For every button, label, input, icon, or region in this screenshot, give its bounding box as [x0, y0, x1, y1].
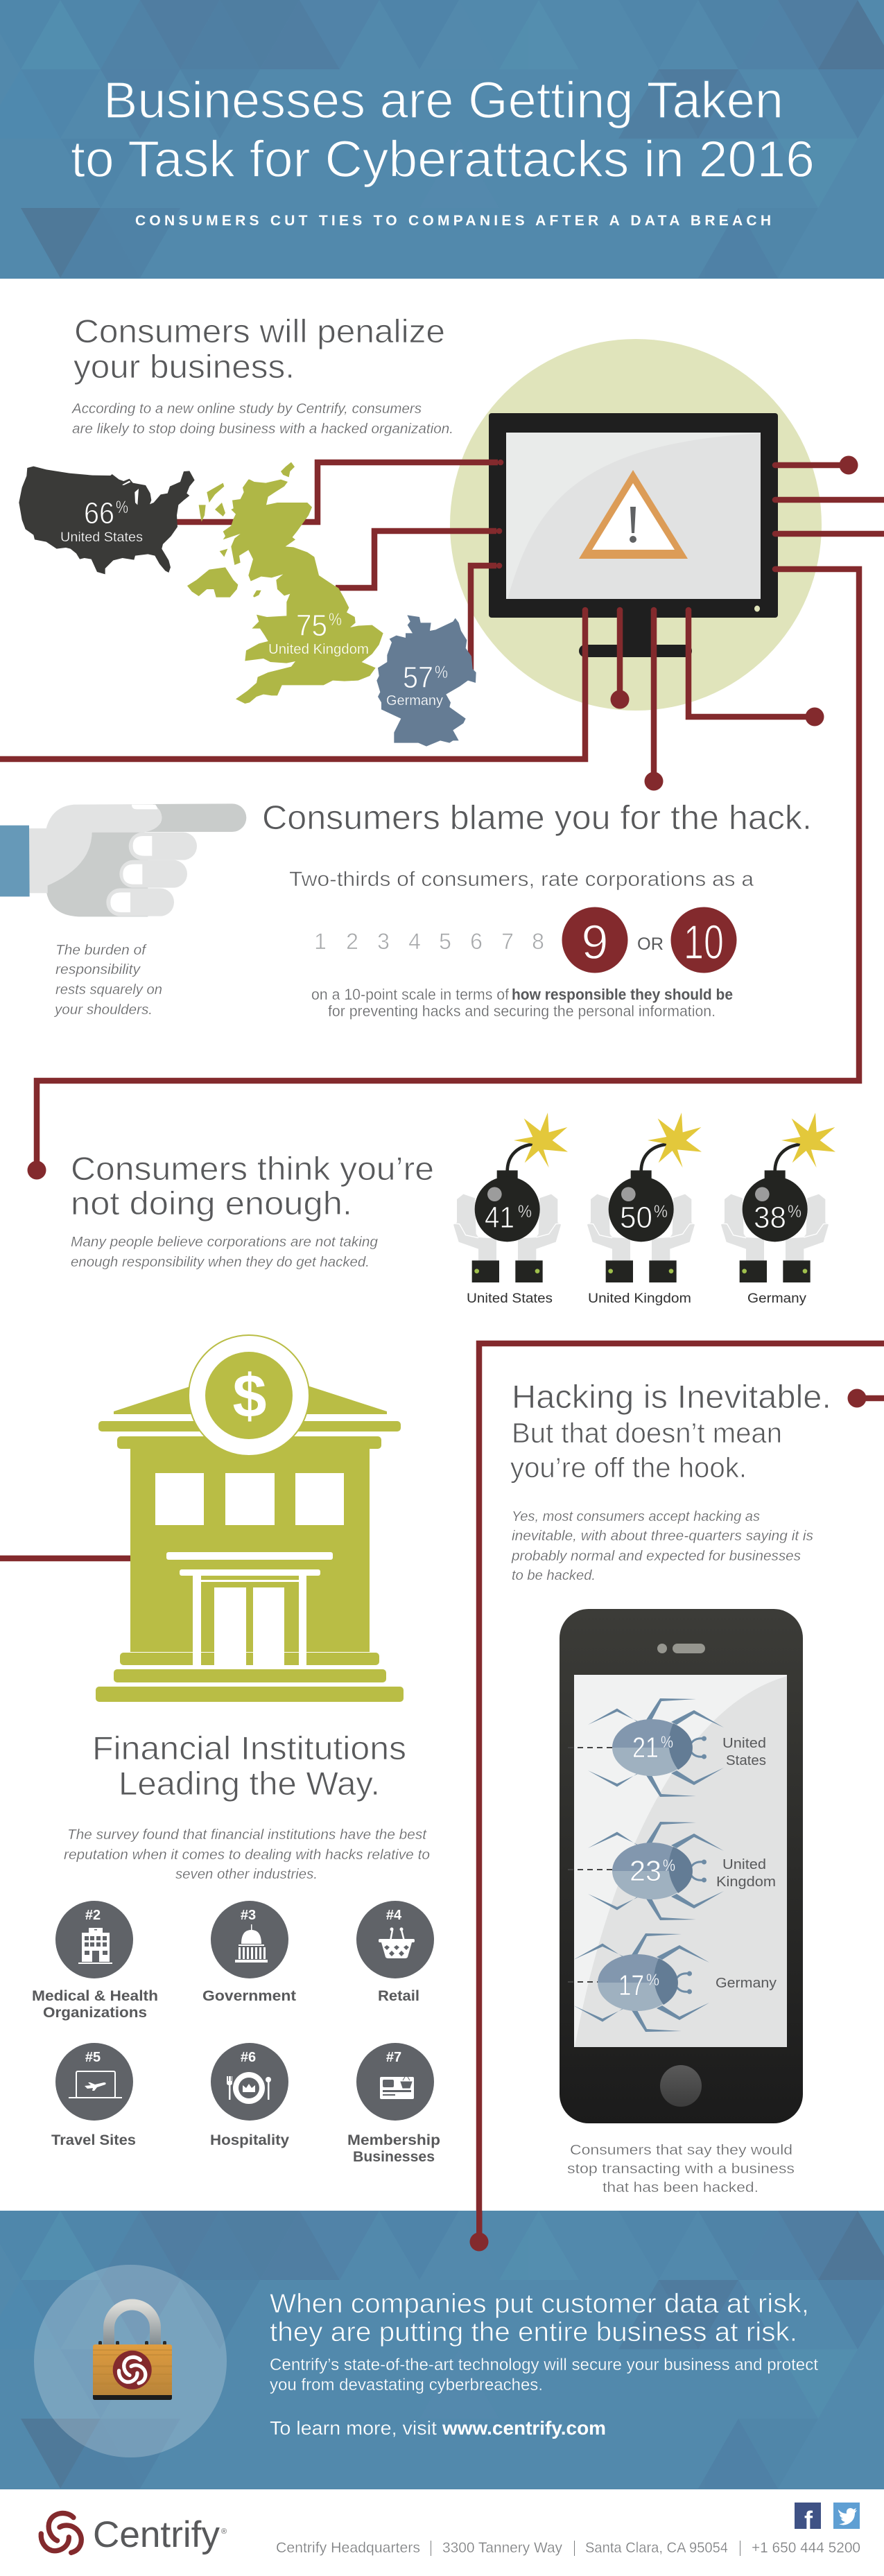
address line — [276, 2540, 860, 2556]
burden caption: rests squarely on — [55, 982, 162, 998]
bug: united states: United — [722, 1736, 766, 1751]
monitor screen — [506, 433, 761, 599]
icon: hospital — [78, 1928, 112, 1964]
coin: $ — [233, 1361, 266, 1430]
call to action: www.centrify.com — [442, 2417, 606, 2439]
bug: germany — [568, 1933, 777, 2032]
bomb: united kingdom: % — [654, 1202, 668, 1221]
bug: united states: % — [661, 1733, 673, 1752]
address line: Centrify Headquarters — [276, 2540, 420, 2556]
map: germany — [376, 615, 476, 747]
map: united kingdom: % — [329, 610, 342, 629]
not doing enough paragraph: enough responsibility when they do get hacked. — [71, 1255, 370, 1270]
map: united states — [19, 467, 195, 574]
map: united kingdom — [187, 462, 383, 704]
icon: plate and cutlery — [227, 2072, 271, 2104]
hacking paragraph: inevitable, with about three-quarters saying it is — [512, 1529, 813, 1544]
burden caption: The burden of — [55, 943, 148, 958]
address line: 3300 Tannery Way — [442, 2540, 562, 2556]
rating scale — [314, 907, 736, 973]
heading: financial institutions: Financial Institutions — [92, 1730, 406, 1766]
financial paragraph: reputation when it comes to dealing with hacks relative to — [64, 1847, 430, 1863]
map: united states: % — [116, 498, 128, 517]
icon: pointing hand — [0, 803, 246, 916]
map: germany: % — [435, 663, 448, 682]
rating scale: 10 — [684, 915, 724, 969]
phone caption — [567, 2143, 795, 2195]
icon: twitter — [833, 2503, 860, 2529]
title — [71, 71, 815, 188]
call to action — [270, 2417, 606, 2439]
bomb: united kingdom: United Kingdom — [588, 1291, 691, 1306]
connector end — [470, 2211, 488, 2252]
bomb: germany — [721, 1113, 835, 1306]
address line: +1 650 444 5200 — [752, 2540, 860, 2556]
heading: hacking is inevitable: Hacking is Inevitable. — [512, 1378, 831, 1415]
monitor illustration — [450, 339, 822, 711]
bug: united kingdom: Kingdom — [716, 1874, 776, 1890]
call to action: To learn more, visit — [270, 2417, 437, 2439]
rating scale: OR — [637, 934, 664, 954]
industry: membership businesses — [347, 2043, 440, 2165]
icon: facebook — [795, 2503, 821, 2534]
intro paragraph: are likely to stop doing business with a hacked organization. — [72, 421, 453, 437]
home button — [660, 2065, 702, 2107]
icon: laptop with plane — [69, 2071, 122, 2098]
rating scale: 1 — [314, 929, 327, 954]
connector traces — [0, 456, 884, 2252]
heading: financial institutions: Leading the Way. — [119, 1765, 380, 1802]
heading: consumers will penalize — [73, 313, 445, 385]
industry: hospitality: Hospitality — [210, 2132, 289, 2148]
bug: united states — [568, 1698, 766, 1797]
centrify logo — [41, 2513, 227, 2555]
industry: retail: Retail — [378, 1988, 419, 2004]
responsibility paragraph — [311, 986, 733, 1020]
industry: medical and health — [32, 1901, 158, 2021]
bug: united kingdom: 23 — [630, 1854, 661, 1887]
not doing enough paragraph: Many people believe corporations are not taking — [71, 1235, 378, 1250]
heading: consumers will penalize: Consumers will penalize — [74, 313, 445, 349]
hacking paragraph — [511, 1509, 813, 1583]
industry: medical and health: #2 — [85, 1908, 101, 1923]
industry: medical and health: Organizations — [43, 2005, 147, 2021]
bomb: united kingdom — [587, 1113, 702, 1306]
industry: membership businesses: #7 — [386, 2050, 401, 2065]
icon: basket — [379, 1927, 415, 1958]
background circle — [450, 339, 822, 711]
phone caption: Consumers that say they would — [570, 2143, 792, 2158]
bomb: germany: 38 — [754, 1201, 786, 1235]
icon: capitol — [235, 1924, 268, 1963]
intro paragraph — [71, 401, 453, 437]
map: united states: 66 — [84, 496, 114, 530]
centrify logo: ® — [221, 2527, 227, 2536]
bomb: united states — [453, 1113, 568, 1306]
industry: retail — [356, 1901, 434, 2004]
coin — [189, 1335, 309, 1456]
map: germany: Germany — [386, 693, 443, 708]
industry: travel sites — [51, 2043, 136, 2148]
bomb: united states: United States — [467, 1291, 553, 1306]
title: Businesses are Getting Taken — [103, 71, 783, 129]
bug: united states: 21 — [632, 1731, 659, 1764]
rating scale: 3 — [377, 929, 390, 954]
phone screen — [574, 1675, 787, 2047]
title: to Task for Cyberattacks in 2016 — [71, 130, 815, 188]
bug: germany: Germany — [716, 1976, 777, 1991]
burden caption — [53, 943, 162, 1018]
closing headline: When companies put customer data at risk, — [270, 2289, 809, 2319]
bomb: united states: % — [518, 1202, 532, 1221]
responsibility paragraph: for preventing hacks and securing the personal information. — [328, 1002, 716, 1020]
phone body — [560, 1609, 803, 2123]
monitor stand — [579, 618, 692, 657]
rating scale: 4 — [408, 929, 421, 954]
closing headline — [270, 2289, 809, 2347]
closing paragraph: Centrify’s state-of-the-art technology will secure your business and protect — [270, 2356, 818, 2374]
heading: not doing enough: not doing enough. — [71, 1185, 352, 1221]
heading: financial institutions — [92, 1730, 406, 1802]
industry: government — [202, 1901, 296, 2004]
bomb: united states: 41 — [485, 1201, 514, 1235]
hacking paragraph: Yes, most consumers accept hacking as — [512, 1509, 760, 1524]
icon: facebook: f — [804, 2506, 813, 2534]
address line: Santa Clara, CA 95054 — [585, 2540, 728, 2556]
bug: united kingdom: % — [663, 1856, 675, 1875]
responsibility paragraph: on a 10-point scale in terms of — [311, 986, 510, 1003]
bomb: germany: Germany — [747, 1291, 807, 1306]
heading: consumers blame you: Consumers blame you for the hack. — [262, 799, 812, 837]
industry: medical and health: Medical & Health — [32, 1988, 158, 2004]
subtitle: CONSUMERS CUT TIES TO COMPANIES AFTER A DATA BREACH — [135, 213, 771, 229]
icon: membership card — [380, 2077, 414, 2099]
closing paragraph: you from devastating cyberbreaches. — [270, 2376, 543, 2394]
phone caption: that has been hacked. — [603, 2180, 759, 2195]
bomb: united kingdom: 50 — [620, 1201, 652, 1235]
bug: germany: 17 — [618, 1969, 644, 2001]
burden caption: responsibility — [55, 962, 141, 977]
bug: united kingdom — [568, 1822, 776, 1920]
intro paragraph: According to a new online study by Centrify, consumers — [71, 401, 422, 417]
industry: government: #3 — [241, 1908, 256, 1923]
closing headline: they are putting the entire business at risk. — [270, 2317, 797, 2347]
industry: travel sites: #5 — [85, 2050, 101, 2065]
map: germany: 57 — [403, 661, 433, 695]
bug: united kingdom: United — [722, 1857, 766, 1872]
financial paragraph: seven other industries. — [175, 1867, 318, 1882]
speaker — [657, 1644, 705, 1653]
heading: not doing enough: Consumers think you’re — [71, 1150, 434, 1187]
financial paragraph: The survey found that financial institutions have the best — [67, 1827, 427, 1843]
power light — [754, 606, 760, 611]
industry: travel sites: Travel Sites — [51, 2132, 136, 2148]
map: united states: United States — [60, 530, 143, 545]
rating scale: 2 — [346, 929, 358, 954]
rating scale: 6 — [470, 929, 483, 954]
icon: padlock — [34, 2265, 227, 2457]
footer banner — [0, 2211, 884, 2489]
rating scale: 7 — [501, 929, 514, 954]
industry: retail: #4 — [386, 1908, 402, 1923]
two-thirds text: Two-thirds of consumers, rate corporations as a — [289, 868, 754, 891]
icon: bank building — [96, 1335, 404, 1702]
phone caption: stop transacting with a business — [567, 2161, 795, 2177]
burden caption: your shoulders. — [53, 1002, 153, 1018]
industry: membership businesses: Membership — [347, 2132, 440, 2148]
icon: warning triangle — [579, 470, 688, 559]
bomb: germany: % — [788, 1202, 801, 1221]
responsibility paragraph: how responsible they should be — [512, 986, 733, 1003]
map: united kingdom: United Kingdom — [268, 642, 369, 657]
bug: germany: % — [646, 1971, 659, 1990]
not doing enough paragraph — [71, 1235, 378, 1270]
industry: membership businesses: Businesses — [353, 2149, 435, 2165]
industry: hospitality — [210, 2043, 289, 2148]
heading: consumers will penalize: your business. — [73, 348, 295, 385]
heading: not doing enough — [71, 1150, 434, 1221]
closing paragraph — [270, 2356, 818, 2394]
centrify logo: Centrify — [93, 2514, 220, 2555]
rating scale: 9 — [582, 915, 608, 969]
map: united kingdom: 75 — [296, 609, 327, 643]
monitor body — [489, 413, 778, 618]
industry: hospitality: #6 — [241, 2050, 256, 2065]
heading: hacking is inevitable — [510, 1378, 831, 1483]
industry: government: Government — [202, 1988, 296, 2004]
header banner — [0, 0, 884, 279]
rating scale: 8 — [532, 929, 544, 954]
smartphone — [560, 1609, 803, 2123]
bug: united states: States — [726, 1753, 766, 1768]
hacking paragraph: probably normal and expected for businesses — [511, 1549, 801, 1564]
hacking paragraph: to be hacked. — [512, 1568, 596, 1583]
heading: hacking is inevitable: you’re off the hook. — [510, 1452, 747, 1483]
heading: hacking is inevitable: But that doesn’t mean — [512, 1417, 782, 1449]
rating scale: 5 — [439, 929, 451, 954]
financial paragraph — [64, 1827, 430, 1882]
